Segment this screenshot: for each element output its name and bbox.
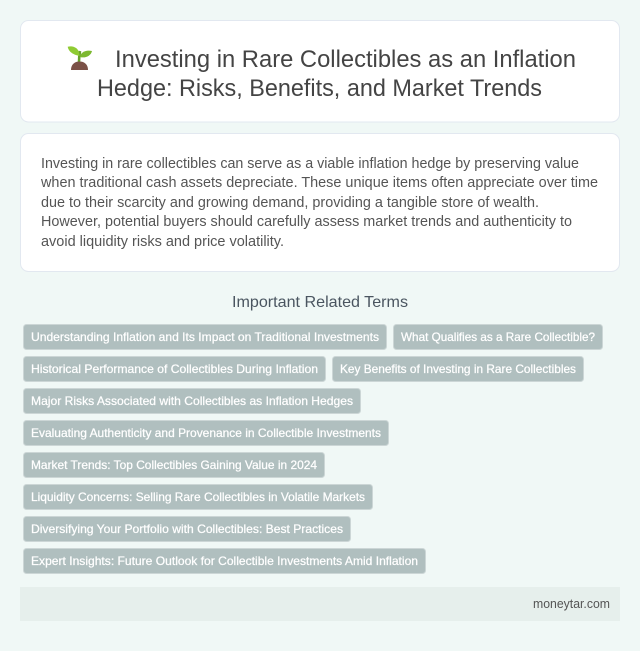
intro paragraph: due to their scarcity and growing demand, providing a tangible store of wealth. [41,194,539,211]
tag: authenticity: Evaluating Authenticity and Provenance in Collectible Investments [31,426,381,440]
title text [97,46,576,102]
tag: understanding inflation: Understanding Inflation and Its Impact on Traditional Investments [31,330,379,344]
tag: diversifying [24,516,350,542]
tag: historical performance [24,356,326,382]
footer source: moneytar.com [533,597,610,611]
tag: diversifying: Diversifying Your Portfolio with Collectibles: Best Practices [31,522,343,536]
tag list [24,324,602,574]
title text: Investing in Rare Collectibles as an Inflation [115,46,576,73]
tag: key benefits: Key Benefits of Investing in Rare Collectibles [340,362,576,376]
tag: major risks: Major Risks Associated with Collectibles as Inflation Hedges [31,394,353,408]
tag: authenticity [24,420,388,446]
tag: what qualifies [394,324,602,350]
tag: liquidity [24,484,372,510]
tag: historical performance: Historical Performance of Collectibles During Inflation [31,362,318,376]
tag: key benefits [332,356,584,382]
intro paragraph: when traditional cash assets depreciate. These unique items often appreciate over time [40,174,598,191]
tag: market trends [24,452,324,478]
footer band [20,587,620,621]
tag: major risks [24,388,360,414]
heading: important related terms: Important Related Terms [232,294,408,311]
intro paragraph [40,155,598,250]
tag: expert insights [24,548,426,574]
panel: title card [20,20,620,122]
tag: market trends: Market Trends: Top Collectibles Gaining Value in 2024 [31,458,317,472]
tag: understanding inflation [24,324,386,350]
panel: introduction [20,134,620,272]
icon: seedling [68,46,92,70]
tag: expert insights: Expert Insights: Future Outlook for Collectible Investments Amid Inflation [31,554,418,568]
tag: liquidity: Liquidity Concerns: Selling Rare Collectibles in Volatile Markets [31,490,365,504]
tag: what qualifies: What Qualifies as a Rare Collectible? [401,330,595,344]
intro paragraph: Investing in rare collectibles can serve as a viable inflation hedge by preserving value [41,155,579,172]
intro paragraph: avoid liquidity risks and price volatility. [41,233,284,250]
title text: Hedge: Risks, Benefits, and Market Trends [97,75,542,102]
intro paragraph: However, potential buyers should carefully assess market trends and authenticity to [41,213,572,230]
